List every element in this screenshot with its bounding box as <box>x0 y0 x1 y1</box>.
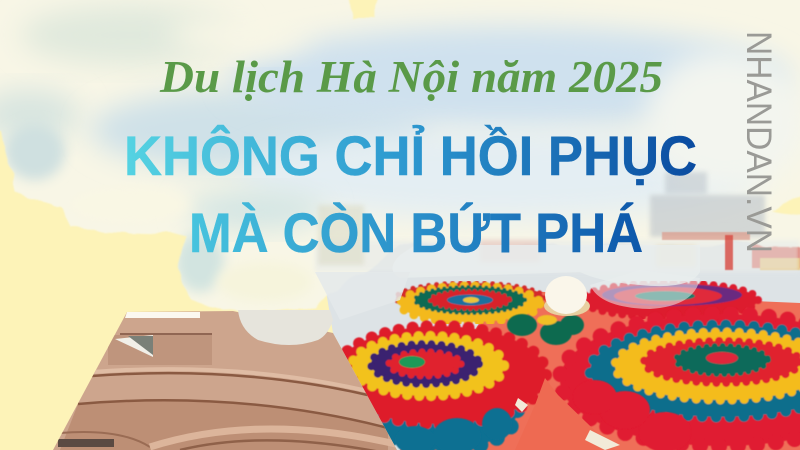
incense flower: top centre <box>396 283 544 322</box>
main title: KHÔNG CHỈ HỒI PHỤC <box>124 124 697 187</box>
incense small green tufts <box>507 314 584 345</box>
photo: incense flower display <box>315 225 800 450</box>
main title: MÀ CÒN BỨT PHÁ <box>189 201 643 264</box>
cloud lobes fading over the photo <box>238 245 700 345</box>
main title <box>124 124 697 264</box>
watercolor clouds <box>0 0 800 320</box>
incense flower: main right <box>560 314 800 446</box>
incense flower: top right <box>582 283 758 317</box>
photo: museum building <box>50 310 402 450</box>
incense flower: lower left <box>334 326 546 450</box>
incense stems <box>515 398 620 450</box>
foreground red tufts <box>395 380 691 450</box>
orange floor between flowers <box>535 378 591 427</box>
subtitle: Du lịch Hà Nội năm 2025 <box>159 52 663 102</box>
watermark: NHANDAN.VN: NHANDAN.VN <box>739 31 778 253</box>
conical hat <box>544 276 590 316</box>
faded street scene behind title <box>315 172 800 272</box>
